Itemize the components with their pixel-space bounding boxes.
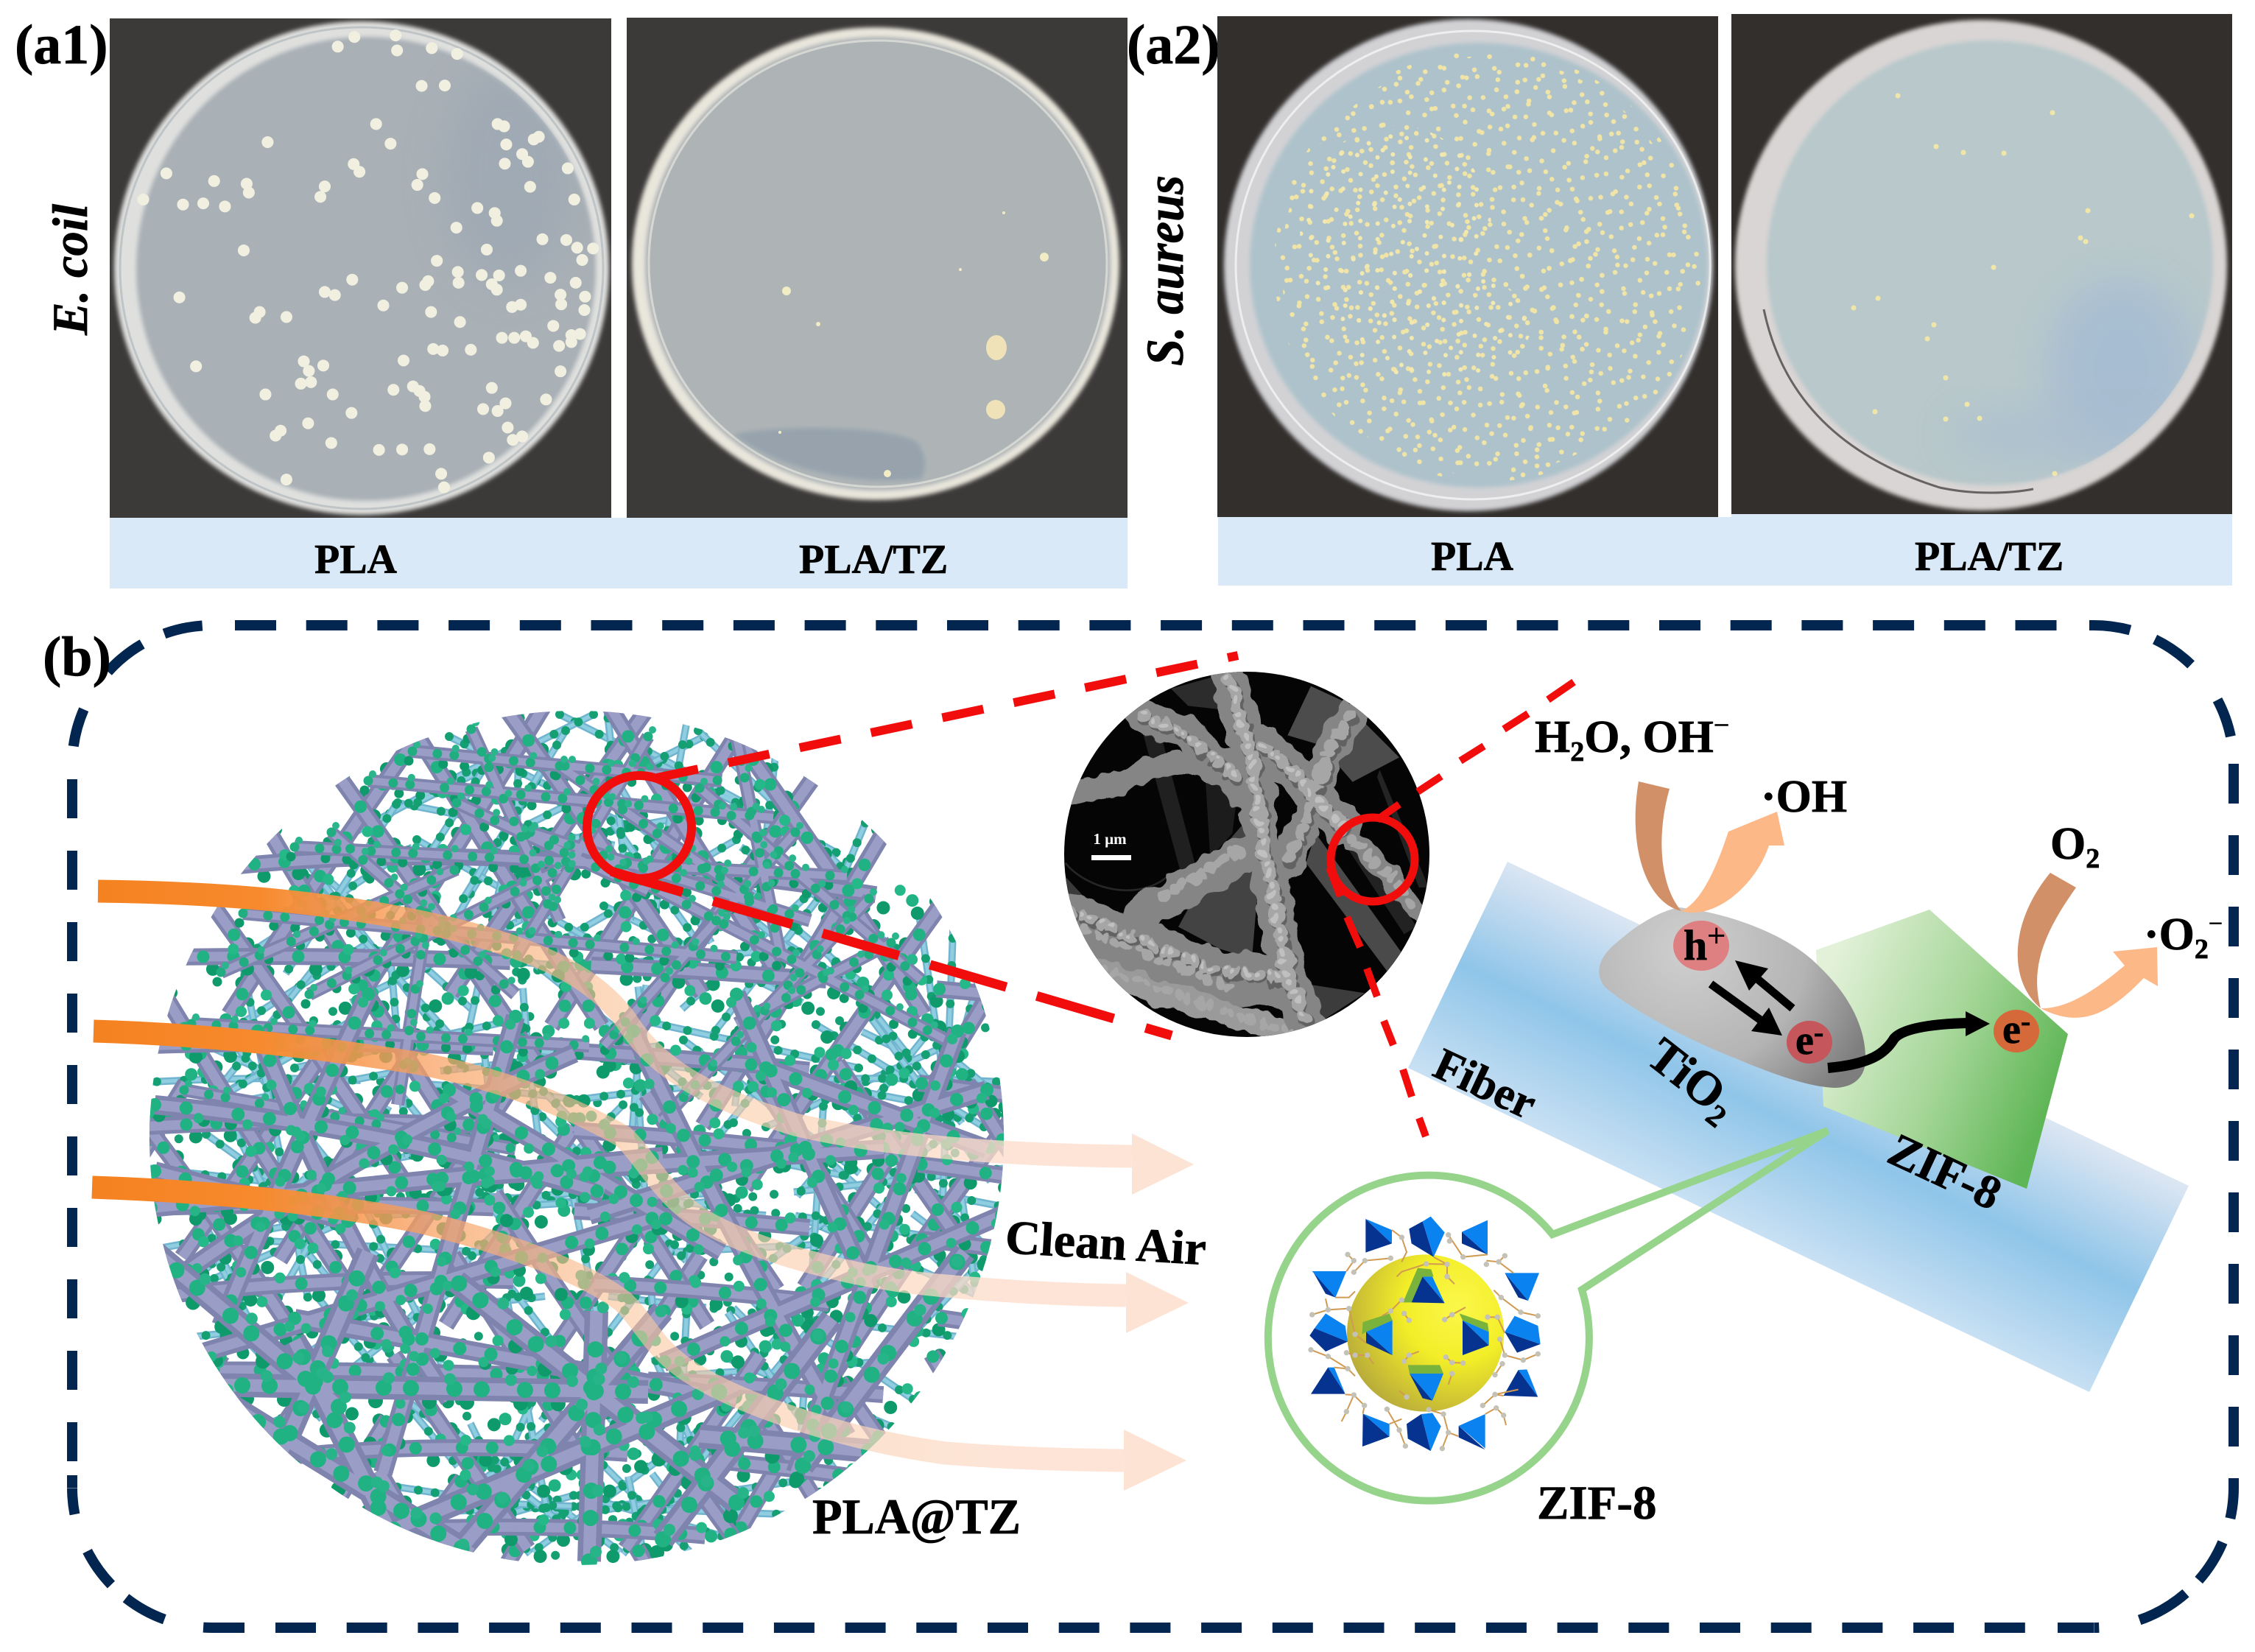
fibre band	[1408, 862, 2189, 1392]
e- site on TiO2: -	[1814, 1016, 1823, 1049]
upper guide	[1377, 682, 1574, 820]
colonies	[1854, 96, 2192, 474]
arrow: electron to ZIF-8	[1828, 1011, 1990, 1068]
label bar	[1218, 514, 2232, 586]
upper guide	[657, 655, 1238, 778]
air flow arrows	[92, 891, 1194, 1491]
label: (a2): (a2)	[1127, 14, 1220, 76]
ZIF-8 block	[1816, 910, 2068, 1189]
label: Clean Air: Clean Air	[1004, 1211, 1208, 1276]
reaction arrow in: O2	[2018, 873, 2076, 1008]
photo: PLA/TZ plate	[1731, 14, 2232, 514]
e- site on TiO2	[1787, 1016, 1832, 1064]
callout: ZIF-8 structure	[1268, 1131, 1828, 1501]
h+ site: +	[1707, 918, 1725, 954]
lower fibres with beads	[149, 1242, 971, 1575]
magnifier circle on SEM	[1331, 818, 1415, 901]
label: TiO2: TiO	[1637, 1027, 1736, 1121]
label: O2: 2	[2086, 843, 2100, 874]
h+ site: h	[1684, 921, 1707, 969]
label: S. aureus: S. aureus	[1136, 175, 1195, 366]
label: TiO2: 2	[1700, 1098, 1732, 1134]
reaction arrow in: H2O, OH-	[1636, 781, 1681, 911]
chart: fibre network PLA@TZ	[125, 697, 1029, 1584]
e- site on ZIF-8: e	[2002, 1007, 2021, 1052]
thin fibres back layer	[140, 701, 1013, 1570]
e- site on ZIF-8	[1994, 1005, 2039, 1052]
flow 3	[92, 1187, 1186, 1491]
colonies	[778, 211, 1049, 477]
magnifier circle on network	[587, 776, 692, 879]
flow 1	[98, 891, 1194, 1195]
label: E. coil: E. coil	[42, 204, 98, 336]
upper fibres with beads	[180, 723, 962, 1159]
label: Fiber: Fiber	[1426, 1038, 1544, 1129]
label: O2: O	[2050, 819, 2086, 869]
molecular framework	[1309, 1217, 1541, 1451]
e- site on TiO2: e	[1795, 1018, 1814, 1064]
long fibres with beads	[125, 697, 1029, 1584]
label: H2O, OH-: O, OH	[1584, 712, 1714, 762]
reaction arrow out: OH	[1681, 812, 1784, 913]
TiO2 particle	[1599, 907, 1865, 1088]
lower guide	[1329, 868, 1426, 1136]
label: H2O, OH-: 2	[1570, 737, 1584, 767]
cage sphere	[1347, 1254, 1504, 1412]
background fibres	[1064, 676, 1429, 1020]
label: PLA/TZ: PLA/TZ	[799, 537, 948, 583]
label: H2O, OH-: H	[1535, 712, 1570, 762]
schematic: photocatalysis on fibre	[1408, 710, 2223, 1392]
red zoom guide lines: SEM to schematic	[1329, 682, 1574, 1136]
label: (b): (b)	[43, 626, 111, 688]
callout bubble	[1268, 1131, 1828, 1501]
label: ZIF-8: ZIF-8	[1537, 1477, 1657, 1530]
label: H2O, OH-: −	[1714, 710, 1729, 741]
dark blue tetrahedra faces	[1309, 1219, 1541, 1451]
photo: PLA plate	[110, 18, 611, 518]
scale text: 1 µm	[1093, 830, 1127, 848]
label bar	[110, 518, 1128, 588]
e- site on ZIF-8: -	[2021, 1005, 2030, 1038]
label: O2 radical: ·O	[2144, 910, 2195, 960]
label: OH radical: ·OH	[1761, 772, 1847, 822]
panel: a2 S. aureus plates	[1127, 14, 2232, 586]
middle fibres with beads	[146, 994, 1006, 1484]
scale bar	[1091, 855, 1131, 860]
red zoom guide lines: network to SEM	[587, 655, 1238, 1036]
flow 2	[94, 1031, 1189, 1333]
colonies	[1274, 50, 1701, 482]
photo: PLA/TZ plate	[627, 18, 1128, 518]
SEM fibres with particles	[1068, 679, 1419, 1035]
arrow: hole transfer	[1735, 960, 1793, 1008]
label: (a1): (a1)	[15, 14, 108, 76]
h+ site	[1673, 918, 1729, 971]
label: ZIF-8 on block: ZIF-8	[1881, 1123, 2010, 1220]
label: PLA: PLA	[314, 537, 398, 583]
light blue tetrahedra faces	[1312, 1217, 1541, 1451]
panel: b dashed frame	[72, 625, 2234, 1628]
green cage windows	[1362, 1268, 1489, 1374]
arrow: electron transfer	[1711, 984, 1782, 1036]
reaction arrow out: O2-	[2041, 947, 2158, 1018]
photo: PLA plate	[1217, 16, 1718, 517]
label: PLA/TZ: PLA/TZ	[1915, 534, 2064, 580]
label: O2 radical: 2	[2195, 934, 2209, 965]
atoms	[1311, 1235, 1538, 1449]
label: O2 radical: −	[2209, 910, 2223, 938]
colonies	[143, 35, 593, 488]
label: PLA: PLA	[1431, 534, 1514, 580]
imidazolate sticks	[1311, 1230, 1538, 1449]
panel: a1 E. coli plates	[15, 14, 1128, 588]
SEM micrograph	[1064, 672, 1429, 1037]
label: PLA@TZ: PLA@TZ	[812, 1488, 1021, 1544]
lower guide	[611, 871, 1172, 1036]
